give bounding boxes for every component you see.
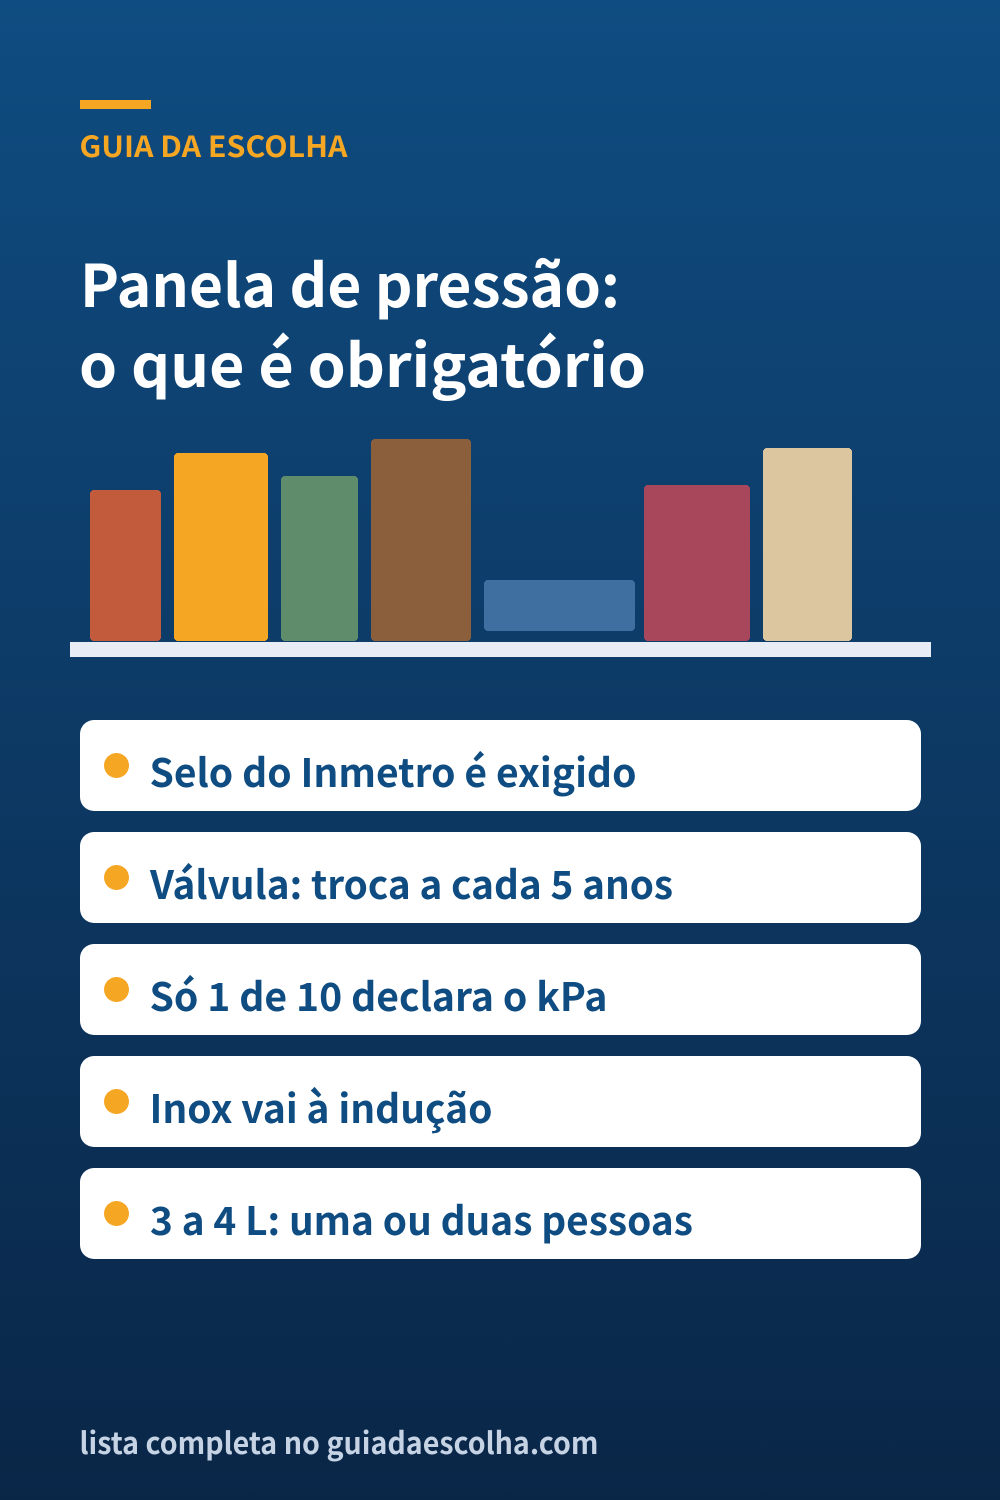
title — [79, 239, 646, 404]
bar: crimson pot — [644, 485, 750, 641]
list item 2: Válvula: troca a cada 5 anos — [149, 855, 673, 911]
illustration: pots on a shelf — [70, 439, 931, 657]
list item 4: Inox vai à indução — [150, 1079, 492, 1135]
eyebrow: brand: GUIA DA ESCOLHA — [80, 124, 348, 166]
list item 1: Selo do Inmetro é exigido — [150, 743, 636, 799]
title: Panela de pressão: — [80, 239, 620, 324]
list item 3: Só 1 de 10 declara o kPa — [150, 967, 608, 1023]
list item 4 — [80, 1056, 921, 1147]
bar: yellow pot — [174, 453, 268, 641]
title: o que é obrigatório — [79, 319, 646, 404]
list item 5: 3 a 4 L: uma ou duas pessoas — [150, 1191, 693, 1247]
bar: brown pot — [371, 439, 471, 641]
list item 5 — [80, 1168, 921, 1259]
bar: blue pot — [484, 580, 635, 631]
shelf — [70, 642, 931, 657]
footer link: lista completa no guiadaescolha.com — [80, 1419, 598, 1463]
list item 1 — [80, 720, 921, 811]
list item 3 — [80, 944, 921, 1035]
bar: green pot — [281, 476, 358, 641]
list item 2 — [80, 832, 921, 923]
bar: red pot — [90, 490, 161, 641]
bar: beige pot — [763, 448, 852, 641]
accent bar — [80, 100, 151, 109]
